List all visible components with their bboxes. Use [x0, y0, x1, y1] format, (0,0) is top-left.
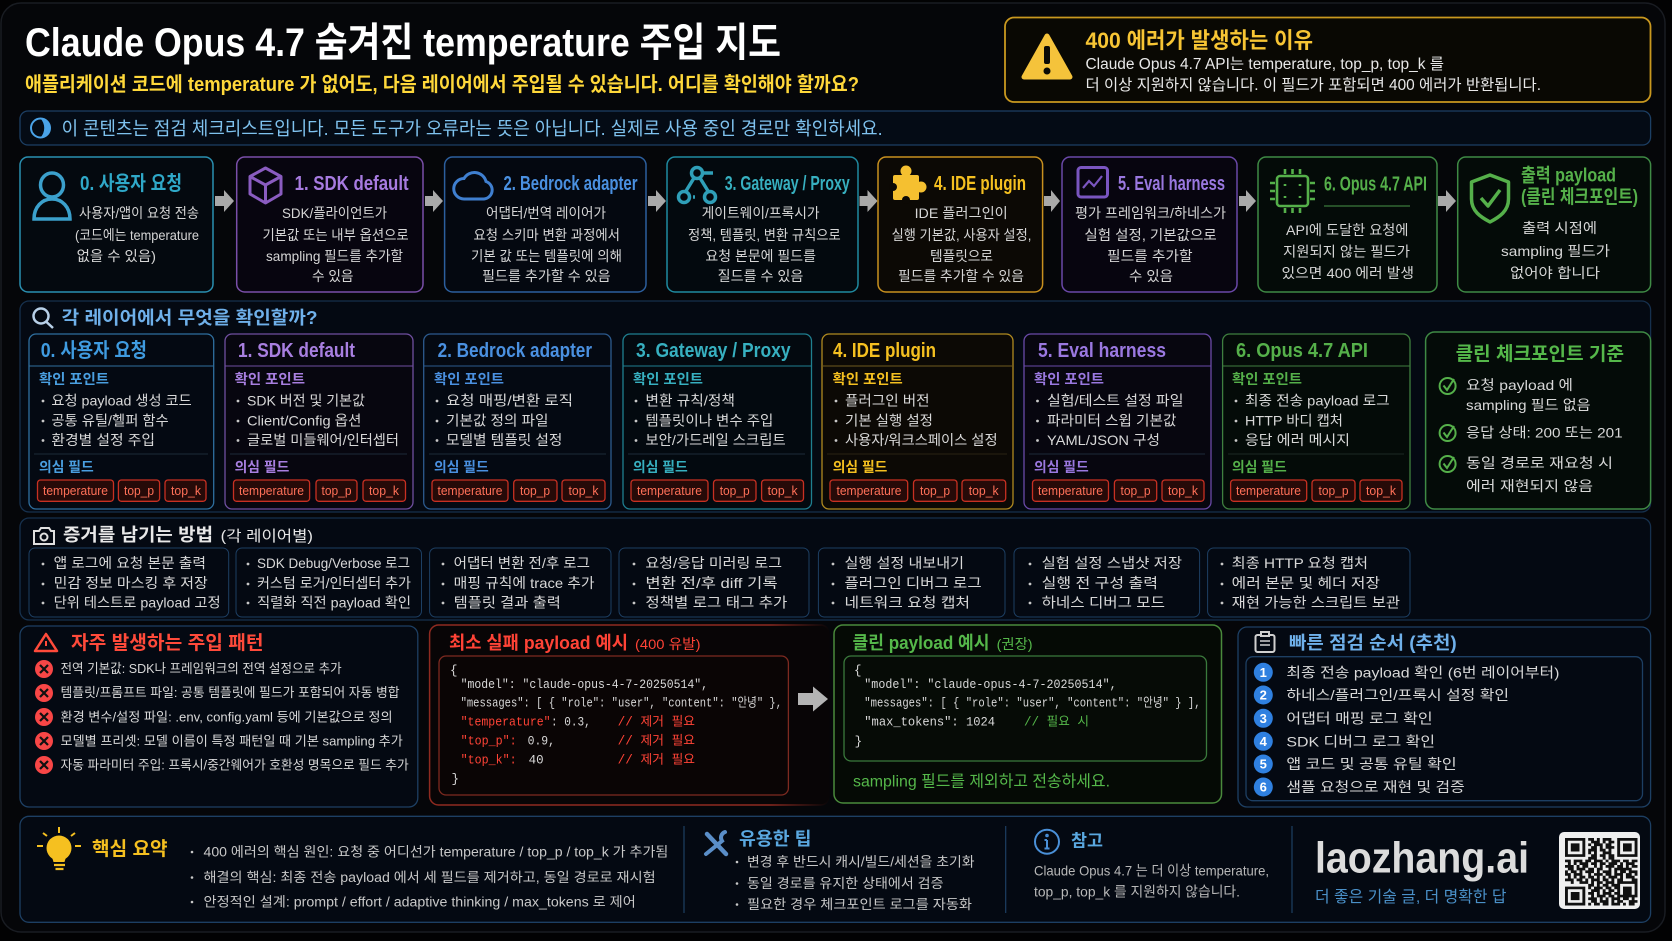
icon: info moon [31, 118, 50, 138]
code block: "messages": [ { "role": "user", "content": "안녕" } ], [864, 696, 1201, 711]
field tags: top_k [568, 484, 599, 498]
ordered steps: 3 [1260, 711, 1267, 726]
card text: 있으면 400 에러 발생 [1282, 265, 1414, 281]
checklist: SDK 버전 및 기본값 [247, 393, 365, 409]
checklist: HTTP 바디 캡처 [1245, 413, 1343, 429]
label: 의심 필드 [1034, 459, 1089, 475]
label: 확인 포인트 [235, 371, 305, 387]
card text: 사용자/앱이 요청 전송 [79, 205, 199, 221]
icon: check [1440, 378, 1456, 394]
ordered steps: 앱 코드 및 공통 유틸 확인 [1286, 756, 1457, 772]
ordered steps: 5 [1260, 757, 1267, 772]
checklist [42, 393, 192, 448]
card text: sampling 필드를 추가할 [266, 248, 403, 264]
code block: // 제거 필요 [618, 752, 695, 767]
label: 의심 필드 [39, 459, 94, 475]
field tags: top_p [124, 484, 154, 498]
field tags: temperature [438, 484, 503, 498]
icon: clipboard [1256, 632, 1274, 652]
evidence card 0: 민감 정보 마스킹 후 저장 [54, 575, 208, 591]
heading: 6. Opus 4.7 API [1236, 340, 1368, 362]
field tags [1231, 480, 1402, 501]
checklist: Client/Config 옵션 [247, 413, 362, 429]
code block: // 제거 필요 [618, 733, 695, 748]
field tags: top_p [920, 484, 950, 498]
label: 확인 포인트 [833, 371, 903, 387]
label: 의심 필드 [235, 459, 289, 475]
code block: "model": "claude-opus-4-7-20250514", [461, 678, 708, 692]
card text: 어댑터/번역 레이어가 [486, 205, 606, 221]
checklist: 변환 규칙/정책 [645, 393, 735, 409]
icon: red warning [35, 634, 57, 651]
note text: top_p, top_k 를 지원하지 않습니다. [1034, 884, 1240, 900]
flow card: 3 Gateway Proxy [667, 157, 858, 292]
summary list [191, 845, 668, 910]
pattern list: 템플릿/프롬프트 파일: 공통 템플릿에 필드가 포함되어 자동 병합 [60, 685, 400, 700]
summary list: 400 에러의 핵심 원인: 요청 중 어디선가 temperature / top_p / top_k 가 추가됨 [204, 845, 668, 860]
evidence card 0: 단위 테스트로 payload 고정 [54, 595, 221, 611]
code block: } [855, 735, 862, 749]
evidence card 6: 재현 가능한 스크립트 보관 [1232, 595, 1400, 611]
checklist: 템플릿이나 변수 주입 [645, 413, 773, 429]
panel: footer summary [20, 816, 1651, 922]
card text [471, 205, 622, 284]
heading: 자주 발생하는 주입 패턴 [71, 632, 264, 654]
label: 확인 포인트 [633, 371, 703, 387]
code block [439, 656, 788, 795]
heading: 4. IDE plugin [833, 340, 936, 362]
card text: 요청 본문에 필드를 [705, 248, 816, 264]
checklist [436, 393, 573, 448]
card text: 수 있음 [312, 268, 354, 284]
panel: failing payload example [430, 625, 830, 805]
card text: 실험 설정, 기본값으로 [1084, 227, 1217, 243]
panel: how to keep evidence [20, 518, 1651, 620]
heading: note: 참고 [1071, 832, 1103, 851]
card text [892, 205, 1031, 284]
heading: 클린 payload 예시 [852, 633, 990, 653]
check card 4 [822, 334, 1013, 509]
brand name: laozhang.ai [1315, 833, 1529, 882]
heading: 3. Gateway / Proxy [636, 340, 791, 362]
heading: (400 유발) [635, 636, 701, 652]
info text: 이 콘텐츠는 점검 체크리스트입니다. 모든 도구가 오류라는 뜻은 아닙니다. 실제로 사용 중인 경로만 확인하세요. [62, 118, 883, 139]
tips list: 필요한 경우 체크포인트 로그를 자동화 [747, 897, 972, 912]
card text: SDK/플라이언트가 [282, 205, 387, 221]
section heading: (각 레이어별) [221, 528, 313, 545]
heading: key summary: 핵심 요약 [92, 838, 168, 860]
icon: check [1440, 425, 1456, 441]
checklist: 보안/가드레일 스크립트 [645, 432, 786, 448]
criterion text: 요청 payload 에 [1466, 377, 1573, 393]
arrow [1044, 190, 1060, 212]
arrow: failing to clean [798, 686, 828, 712]
note text: Claude Opus 4.7 는 더 이상 temperature, [1034, 863, 1269, 879]
evidence card 4: 플러그인 디버그 로그 [844, 575, 982, 591]
label: 의심 필드 [633, 459, 688, 475]
pattern list [35, 660, 409, 774]
check card 5 [1024, 334, 1211, 509]
check card 2 [424, 334, 611, 509]
ordered steps: 최종 전송 payload 확인 (6번 레이어부터) [1286, 664, 1560, 680]
pattern list: 전역 기본값: SDK나 프레임워크의 전역 설정으로 추가 [60, 661, 342, 676]
card heading [1521, 165, 1638, 208]
card text: 평가 프레임워크/하네스가 [1075, 205, 1226, 221]
icon: puzzle piece [889, 166, 926, 204]
icon: QR code [1559, 832, 1640, 909]
field tags: top_p [1318, 484, 1349, 498]
card text [1075, 205, 1226, 284]
note: sampling 필드를 제외하고 전송하세요. [853, 773, 1110, 791]
label: 의심 필드 [833, 459, 888, 475]
heading: 2. Bedrock adapter [438, 340, 592, 362]
checklist: 응답 에러 메시지 [1245, 432, 1350, 448]
code block: } [452, 773, 459, 787]
code block: "messages": [ { "role": "user", "content": "안녕" }, [461, 696, 782, 711]
evidence card 5: 실험 설정 스냅샷 저장 [1042, 555, 1182, 571]
check card 3 [623, 334, 812, 509]
code block: "top_p": [461, 734, 517, 748]
card text: sampling 필드가 [1501, 243, 1610, 259]
icon: tools [706, 832, 726, 854]
callout text: 더 이상 지원하지 않습니다. 이 필드가 포함되면 400 에러가 반환됩니다. [1086, 76, 1541, 94]
icon: magnifier [34, 308, 53, 328]
callout: why 400 error [1005, 18, 1650, 102]
card text: 필드를 추가할 [1107, 248, 1193, 264]
heading: 1. SDK default [238, 340, 355, 362]
card text: 필드를 추가할 수 있음 [482, 268, 611, 284]
callout text [1086, 55, 1541, 94]
evidence card 4 [818, 548, 1005, 617]
card text: (코드에는 temperature [75, 227, 199, 243]
code block: 0.9, [528, 734, 555, 748]
ordered steps: 어댑터 매핑 로그 확인 [1286, 710, 1433, 726]
card text: 출력 시점에 [1522, 220, 1597, 236]
ordered steps: 4 [1260, 734, 1268, 749]
card heading: 1. SDK default [295, 173, 409, 195]
panel: what to check per layer [20, 301, 1651, 512]
card text [75, 205, 199, 264]
code block: { [450, 664, 458, 678]
card text: IDE 플러그인이 [915, 205, 1008, 221]
arrow [648, 190, 666, 212]
code block: // 제거 필요 [618, 715, 695, 730]
checklist: YAML/JSON 구성 [1047, 432, 1160, 448]
evidence card 3: 요청/응답 미러링 로그 [645, 555, 782, 571]
checklist: 최종 전송 payload 로그 [1245, 393, 1390, 409]
card text [688, 205, 841, 284]
ordered steps [1246, 657, 1642, 801]
check card 6 [1223, 334, 1410, 509]
field tags: top_k [1366, 484, 1397, 498]
field tags: top_k [171, 484, 202, 498]
evidence card 1 [236, 548, 422, 617]
evidence card 2: 매핑 규칙에 trace 추가 [454, 575, 595, 591]
field tags [1032, 480, 1204, 501]
icon: chip [1270, 169, 1315, 213]
checklist: 기본 실행 설정 [845, 413, 933, 429]
evidence card 3: 정책별 로그 태그 추가 [645, 595, 788, 611]
ordered steps: SDK 디버그 로그 확인 [1286, 733, 1435, 749]
checklist: 공통 유틸/헬퍼 함수 [51, 413, 169, 429]
card text: 없어야 합니다 [1510, 265, 1600, 281]
check card 0 [29, 334, 214, 509]
criterion text: 에러 재현되지 않음 [1466, 478, 1593, 494]
code block: "max_tokens": 1024 [864, 716, 995, 730]
code block: : 0.3, [551, 716, 591, 730]
checklist [1235, 393, 1390, 448]
label: 확인 포인트 [1034, 371, 1104, 387]
label: 의심 필드 [1232, 459, 1287, 475]
arrow [1239, 190, 1256, 212]
criterion text [1466, 377, 1591, 413]
code block: 40 [529, 753, 544, 767]
field tags: top_k [1168, 484, 1199, 498]
heading: (권장) [997, 636, 1033, 652]
field tags: top_p [322, 484, 352, 498]
label: 확인 포인트 [39, 371, 109, 387]
icon: light bulb [37, 827, 81, 869]
field tags: top_p [520, 484, 550, 498]
field tags [830, 480, 1006, 501]
arrow [425, 190, 443, 212]
pattern list: 환경 변수/설정 파일: .env, config.yaml 등에 기본값으로 정의 [60, 710, 393, 725]
evidence card 2: 템플릿 결과 출력 [454, 595, 561, 611]
evidence card 5: 하네스 디버그 모드 [1042, 595, 1165, 611]
arrow [1438, 190, 1456, 212]
checklist: 기본값 정의 파일 [446, 413, 548, 429]
field tags: temperature [836, 484, 902, 498]
pattern list: 자동 파라미터 주입: 프록시/중간웨어가 호환성 명목으로 필드 추가 [60, 758, 409, 773]
tips list [736, 855, 975, 912]
checklist [635, 393, 786, 448]
panel: clean checkpoint criteria [1426, 332, 1651, 509]
flow card: 0 user request [20, 157, 213, 292]
icon: cloud [454, 173, 492, 199]
card heading: 3. Gateway / Proxy [725, 173, 850, 195]
code block: "model": "claude-opus-4-7-20250514", [864, 678, 1117, 692]
field tags: temperature [1236, 484, 1301, 498]
card text: 필드를 추가할 수 있음 [898, 268, 1024, 284]
card heading: (클린 체크포인트) [1521, 186, 1638, 208]
evidence card 2 [430, 548, 611, 617]
evidence card 3: 변환 전/후 diff 기록 [645, 575, 778, 591]
evidence card 0: 앱 로그에 요청 본문 출력 [54, 555, 206, 571]
info bar [20, 111, 1651, 145]
field tags: top_k [969, 484, 999, 498]
panel: quick check order [1238, 627, 1651, 807]
evidence card 6: 최종 HTTP 요청 캡처 [1232, 555, 1368, 571]
card heading: 출력 payload [1521, 165, 1616, 187]
field tags: top_k [768, 484, 798, 498]
ordered steps: 샘플 요청으로 재현 및 검증 [1286, 779, 1465, 795]
label: 의심 필드 [434, 459, 489, 475]
card text: 기본 값 또는 템플릿에 의해 [471, 248, 622, 264]
card heading: 2. Bedrock adapter [504, 173, 638, 195]
evidence card 6: 에러 본문 및 헤더 저장 [1232, 575, 1380, 591]
field tags: temperature [43, 484, 108, 498]
field tags: temperature [239, 484, 304, 498]
title: Claude Opus 4.7 숨겨진 temperature 주입 지도 [25, 21, 781, 65]
checklist [1036, 393, 1184, 448]
pattern list: 모델별 프리셋: 모델 이름이 특정 패턴일 때 기본 sampling 추가 [60, 734, 403, 749]
flow card: 6 Opus API [1258, 157, 1437, 292]
field tags [631, 480, 804, 501]
check card 1 [225, 334, 413, 509]
evidence card 5: 실행 전 구성 출력 [1042, 575, 1158, 591]
heading: 5. Eval harness [1038, 340, 1166, 362]
flow card: output payload [1458, 157, 1651, 292]
checklist: 모델별 템플릿 설정 [446, 432, 562, 448]
card text: 기본값 또는 내부 옵션으로 [262, 227, 409, 243]
checklist: 플러그인 버전 [845, 393, 930, 409]
callout heading: 400 에러가 발생하는 이유 [1086, 28, 1313, 53]
evidence card 3 [619, 548, 809, 617]
card text: API에 도달한 요청에 [1286, 222, 1408, 238]
flow card: 5 Eval harness [1062, 157, 1237, 292]
icon: check [1440, 456, 1456, 472]
card text [1501, 220, 1610, 281]
heading: 0. 사용자 요청 [41, 339, 147, 362]
panel: frequent injection patterns [20, 626, 418, 807]
icon: camera [34, 528, 54, 544]
heading: 클린 체크포인트 기준 [1456, 343, 1624, 365]
evidence card 5 [1014, 548, 1200, 617]
heading: 최소 실패 payload 예시 [449, 633, 628, 653]
label: 확인 포인트 [434, 371, 504, 387]
ordered steps: 하네스/플러그인/프록시 설정 확인 [1286, 687, 1509, 703]
card text: 지원되지 않는 필드가 [1283, 244, 1410, 260]
card heading: 0. 사용자 요청 [80, 172, 182, 195]
checklist [835, 393, 998, 448]
checklist: 글로벌 미들웨어/인터셉터 [247, 432, 399, 448]
criterion text: 응답 상태: 200 또는 201 [1466, 425, 1623, 441]
arrow [860, 190, 878, 212]
code block: "top_k": [461, 753, 517, 767]
panel: clean payload example [834, 625, 1222, 803]
evidence card 4: 실행 설정 내보내기 [844, 555, 964, 571]
checklist: 요청 매핑/변환 로직 [446, 393, 573, 409]
icon: network nodes [678, 168, 716, 202]
heading: 빠른 점검 순서 (추천) [1289, 633, 1457, 653]
card text: 실행 기본값, 사용자 설정, [892, 227, 1031, 243]
card text: 정책, 템플릿, 변환 규칙으로 [688, 227, 841, 243]
field tags [432, 480, 605, 501]
card heading: 4. IDE plugin [934, 173, 1026, 195]
ordered steps: 2 [1260, 688, 1267, 703]
icon: info [1035, 830, 1059, 854]
card heading: 6. Opus 4.7 API [1324, 174, 1427, 196]
criterion text [1466, 455, 1613, 494]
flow card: 2 Bedrock adapter [445, 157, 646, 292]
evidence card 1: 직렬화 직전 payload 확인 [257, 595, 411, 611]
ordered steps: 1 [1260, 665, 1267, 680]
card text: 수 있음 [1129, 268, 1173, 284]
card text: 질드를 수 있음 [718, 268, 804, 284]
ordered steps: 6 [1260, 780, 1267, 795]
checklist: 요청 payload 생성 코드 [51, 393, 192, 409]
checklist: 사용자/워크스페이스 설정 [845, 432, 998, 448]
label: 확인 포인트 [1232, 371, 1302, 387]
checklist [237, 393, 399, 448]
evidence card 1: SDK Debug/Verbose 로그 [257, 555, 410, 571]
heading: tips: 유용한 팁 [739, 829, 812, 849]
flow card: 4 IDE plugin [878, 157, 1043, 292]
flow card: 1 SDK default [237, 157, 423, 292]
evidence card 1: 커스텀 로거/인터셉터 추가 [257, 575, 411, 591]
section heading [63, 525, 313, 545]
field tags: temperature [637, 484, 702, 498]
section heading: 각 레이어에서 무엇을 확인할까? [62, 308, 318, 328]
section heading: 증거를 남기는 방법 [63, 525, 213, 545]
code block: // 필요 시 [1024, 715, 1089, 730]
criterion text: 동일 경로로 재요청 시 [1466, 455, 1613, 471]
field tags: temperature [1038, 484, 1103, 498]
card text [1282, 222, 1414, 281]
evidence card 0 [29, 548, 229, 617]
checklist: 환경별 설정 주입 [51, 432, 155, 448]
code block: { [854, 664, 862, 678]
icon: person [34, 173, 70, 219]
brand tagline: 더 좋은 기술 글, 더 명확한 답 [1315, 888, 1507, 906]
card text [262, 205, 409, 284]
icon: chart [1078, 168, 1108, 197]
field tags [234, 480, 406, 501]
summary list: 해결의 핵심: 최종 전송 payload 에서 세 필드를 제거하고, 동일 경로로 재시험 [204, 870, 656, 885]
card text: 없을 수 있음) [77, 248, 156, 264]
subtitle: 애플리케이션 코드에 temperature 가 없어도, 다음 레이어에서 주입될 수 있습니다. 어디를 확인해야 할까요? [25, 73, 859, 96]
tips list: 동일 경로를 유지한 상태에서 검증 [747, 876, 944, 891]
field tags [38, 480, 206, 501]
criterion text: sampling 필드 없음 [1466, 397, 1591, 413]
evidence card 6 [1208, 548, 1410, 617]
checklist: 파라미터 스윕 기본값 [1047, 413, 1177, 429]
code block: "temperature" [461, 716, 551, 730]
evidence card 2: 어댑터 변환 전/후 로그 [454, 555, 590, 571]
code block [844, 656, 1206, 761]
icon: shield check [1472, 175, 1508, 222]
callout text: Claude Opus 4.7 API는 temperature, top_p, top_k 를 [1086, 55, 1444, 73]
summary list: 안정적인 설계: prompt / effort / adaptive thinking / max_tokens 로 제어 [204, 895, 636, 910]
icon: cube [250, 168, 281, 203]
field tags: top_p [720, 484, 750, 498]
card heading: 5. Eval harness [1118, 173, 1225, 195]
evidence card 4: 네트워크 요청 캡처 [844, 595, 970, 611]
card text: 템플릿으로 [930, 248, 993, 264]
arrow [215, 190, 234, 212]
checklist: 실험/테스트 설정 파일 [1047, 393, 1184, 409]
note text [1034, 863, 1269, 900]
tips list: 변경 후 반드시 캐시/빌드/세션을 초기화 [747, 855, 975, 870]
field tags: top_k [369, 484, 400, 498]
field tags: top_p [1120, 484, 1151, 498]
card text: 요청 스키마 변환 과정에서 [474, 227, 620, 243]
card text: 게이트웨이/프록시가 [702, 205, 820, 221]
icon: warning triangle [1024, 36, 1070, 77]
